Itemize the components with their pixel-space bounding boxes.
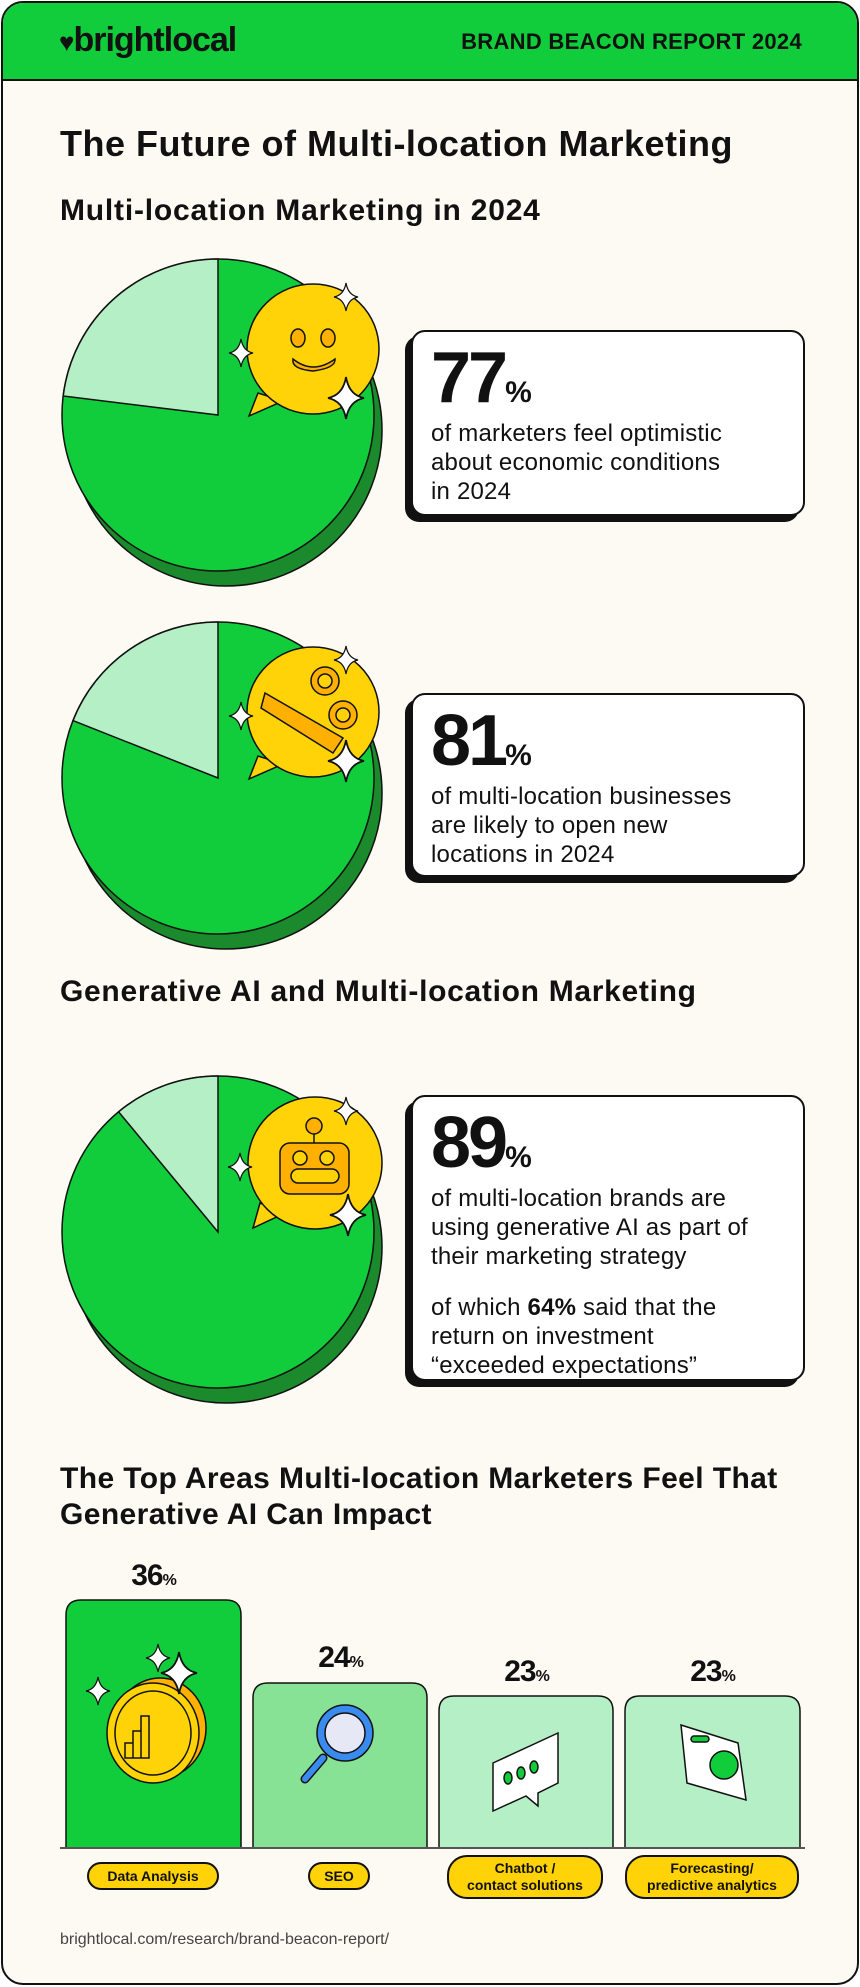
- heading: top areas: Generative AI Can Impact: [60, 1498, 432, 1531]
- label: Chatbot: contact solutions: [467, 1877, 583, 1893]
- title: The Future of Multi-location Marketing: [60, 123, 733, 164]
- card: 77%: about economic conditions: [431, 449, 720, 476]
- label: Data Analysis: Data Analysis: [107, 1868, 199, 1884]
- bar: chatbot: [439, 1696, 613, 1847]
- subtitle: 2024: Multi-location Marketing in 2024: [60, 194, 541, 227]
- card: 89%: return on investment: [431, 1323, 654, 1350]
- label: Chatbot: Chatbot /: [495, 1860, 555, 1876]
- bar: SEO: [253, 1683, 427, 1847]
- label: SEO: SEO: [324, 1868, 354, 1884]
- value: 24%: 24%: [318, 1641, 363, 1674]
- card: 81%: are likely to open new: [431, 812, 668, 839]
- card: 77%: 77%: [431, 338, 532, 418]
- card: 81%: [411, 693, 805, 877]
- label: SEO: [308, 1862, 370, 1890]
- bar: data analysis: [66, 1600, 241, 1847]
- subtitle: generative AI: Generative AI and Multi-location Marketing: [60, 975, 697, 1008]
- bar: forecasting: [625, 1696, 800, 1847]
- label: Forecasting: Forecasting/: [670, 1860, 754, 1876]
- card: 77%: [411, 330, 805, 516]
- card: 89%: [411, 1095, 805, 1381]
- report name: BRAND BEACON REPORT 2024: [461, 29, 802, 54]
- label: Forecasting: predictive analytics: [647, 1877, 777, 1893]
- card: 81%: 81%: [431, 701, 532, 781]
- heading: top areas: [60, 1462, 778, 1531]
- pie 3: 89%: [62, 1076, 382, 1403]
- label: Chatbot: [447, 1855, 603, 1899]
- card: 81%: of multi-location businesses: [431, 783, 731, 810]
- heading: top areas: The Top Areas Multi-location Marketers Feel That: [60, 1462, 778, 1495]
- bubble: robot: [228, 1097, 382, 1236]
- pie 1: 77%: [62, 259, 382, 586]
- value: 23% chatbot: 23%: [504, 1655, 549, 1688]
- label: Forecasting: [625, 1855, 799, 1899]
- bubble: smiley: [229, 283, 379, 419]
- card: 89%: 89%: [431, 1103, 532, 1183]
- card: 89%: of which 64% said that the: [431, 1294, 716, 1321]
- bar chart: [60, 1559, 805, 1849]
- card: 77%: of marketers feel optimistic: [431, 420, 722, 447]
- logo: ♥brightlocal: [59, 21, 236, 59]
- footer url: brightlocal.com/research/brand-beacon-report/: [60, 1931, 389, 1948]
- card: 89%: their marketing strategy: [431, 1243, 687, 1270]
- value: 36%: 36%: [131, 1559, 176, 1592]
- card: 89%: “exceeded expectations”: [431, 1352, 697, 1379]
- pie 2: 81%: [62, 622, 382, 949]
- card: 81%: locations in 2024: [431, 841, 615, 868]
- card: 89%: using generative AI as part of: [431, 1214, 748, 1241]
- value: 23% forecasting: 23%: [690, 1655, 735, 1688]
- label: Data Analysis: [87, 1862, 219, 1890]
- header bar: [3, 3, 857, 81]
- card: 77%: in 2024: [431, 478, 511, 505]
- card: 89%: of multi-location brands are: [431, 1185, 726, 1212]
- bubble: scissors: [229, 646, 379, 782]
